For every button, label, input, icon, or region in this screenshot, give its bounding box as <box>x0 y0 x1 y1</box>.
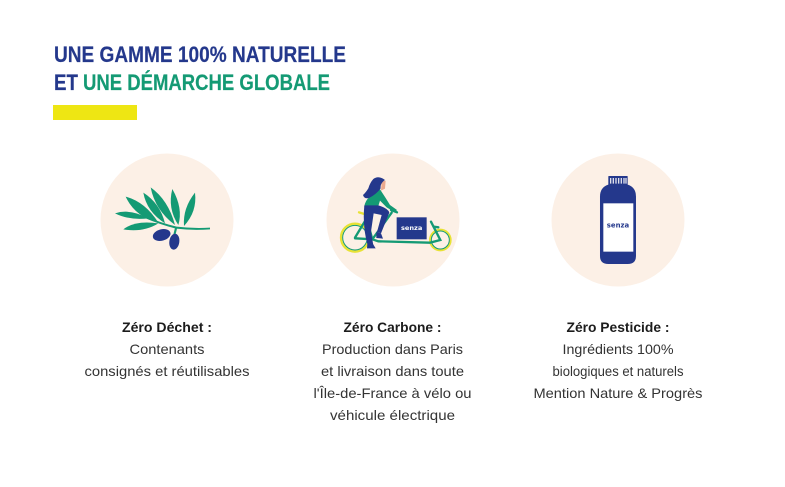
text block: Zéro Pesticide <box>534 319 702 401</box>
text block: Zéro Pesticide: biologiques et naturels <box>552 364 684 379</box>
front wheel <box>430 230 451 250</box>
text block: Zéro Pesticide: Mention Nature & Progrès <box>534 385 702 401</box>
bottle body <box>600 185 636 264</box>
icon: senza bottle <box>552 154 684 286</box>
icon: cargo bike rider <box>326 154 460 286</box>
bottle label <box>603 203 633 252</box>
text block: Zéro Pesticide: Zéro Pesticide : <box>566 319 670 335</box>
yellow accent bar <box>53 105 137 120</box>
text block: Zéro Déchet <box>84 319 250 379</box>
text block: Zéro Carbone: et livraison dans toute <box>321 363 464 379</box>
text block: Zéro Carbone: Production dans Paris <box>322 341 463 357</box>
rear wheel <box>341 224 369 252</box>
text block: Zéro Déchet: Zéro Déchet : <box>122 319 212 335</box>
icon: senza bottle: senza <box>607 221 629 229</box>
text block: Zéro Carbone: Zéro Carbone : <box>344 319 442 335</box>
text block: Zéro Carbone <box>314 319 472 423</box>
title: ET <box>54 70 78 95</box>
title <box>54 42 346 95</box>
icon: olive branch <box>100 154 234 286</box>
text block: Zéro Carbone: l'Île-de-France à vélo ou <box>314 385 472 401</box>
bike frame <box>355 210 440 243</box>
title: UNE DÉMARCHE GLOBALE <box>83 70 330 95</box>
text block: Zéro Déchet: Contenants <box>130 341 204 357</box>
text block: Zéro Carbone: véhicule électrique <box>330 407 455 423</box>
title: UNE GAMME 100% NATURELLE <box>54 42 346 67</box>
text block: Zéro Pesticide: Ingrédients 100% <box>562 341 674 357</box>
text block: Zéro Déchet: consignés et réutilisables <box>84 363 250 379</box>
rider <box>363 177 397 248</box>
delivery box: senza <box>401 225 422 232</box>
bottle cap <box>608 176 628 185</box>
